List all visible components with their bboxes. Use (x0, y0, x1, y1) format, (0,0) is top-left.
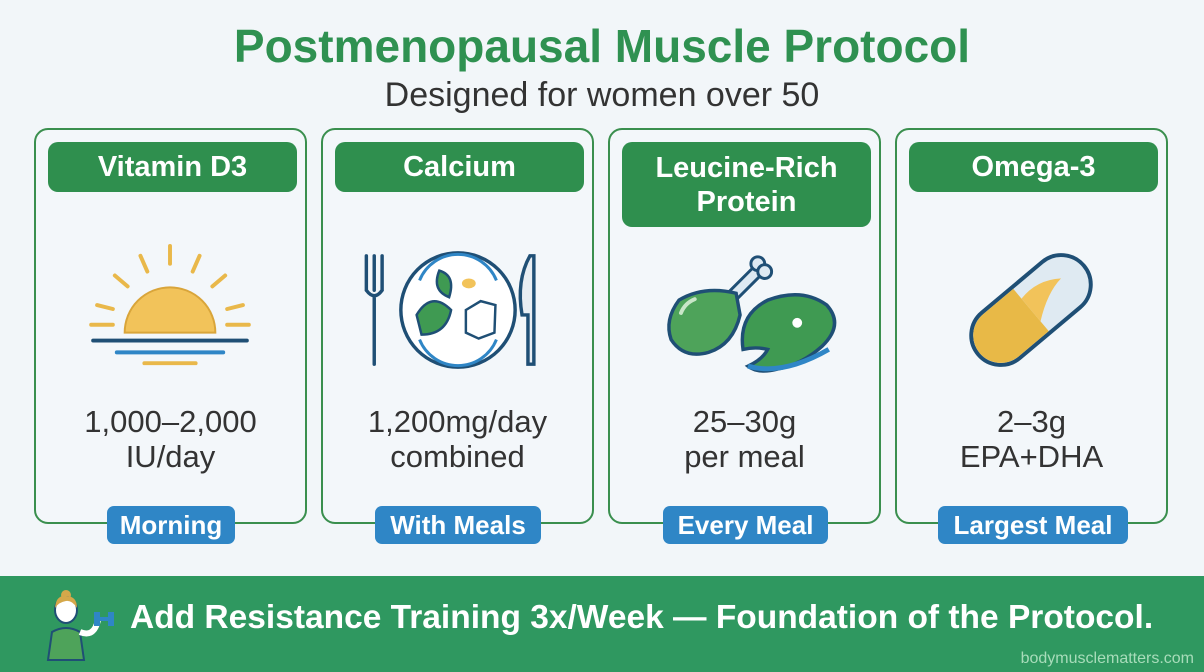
heading: Leucine-Rich Protein: Leucine-Rich (655, 152, 838, 184)
badge: Morning (107, 506, 235, 544)
panel: Leucine-Rich Protein (608, 128, 881, 524)
badge: Largest Meal (938, 506, 1128, 544)
heading: Omega-3: Omega-3 (971, 151, 1096, 183)
panel: Omega-3 (895, 128, 1168, 524)
badge: With Meals: With Meals (390, 510, 526, 540)
badge: With Meals (375, 506, 541, 544)
value: combined (390, 439, 525, 474)
panel: Vitamin D3 (34, 128, 307, 524)
heading: Leucine-Rich Protein (622, 142, 871, 227)
icon: plate (364, 251, 536, 369)
heading: Omega-3 (909, 142, 1158, 192)
badge: Every Meal: Every Meal (678, 510, 813, 540)
icon: woman lifting dumbbell (46, 590, 114, 661)
value (684, 404, 805, 474)
subtitle: Designed for women over 50 (385, 76, 819, 114)
badge: Largest Meal: Largest Meal (954, 510, 1112, 540)
value: per meal (684, 439, 805, 474)
badge: Every Meal (663, 506, 828, 544)
badge: Morning: Morning (120, 510, 222, 540)
icon: sun (89, 244, 251, 366)
heading: Calcium (335, 142, 584, 192)
value: 1,200mg/day (368, 404, 547, 439)
panel: Calcium (321, 128, 594, 524)
value (368, 404, 547, 474)
footer banner (0, 576, 1204, 672)
value: 25–30g (693, 404, 796, 439)
heading: Vitamin D3: Vitamin D3 (98, 151, 247, 183)
value (960, 404, 1104, 474)
icon: chicken and salmon (667, 255, 836, 373)
icon: capsule (969, 253, 1093, 367)
value: 1,000–2,000 (84, 404, 257, 439)
heading: Vitamin D3 (48, 142, 297, 192)
watermark: bodymusclematters.com (1021, 650, 1194, 667)
value: EPA+DHA (960, 439, 1103, 474)
heading: Calcium: Calcium (403, 151, 516, 183)
value: 2–3g (997, 404, 1066, 439)
value (84, 404, 257, 474)
value: IU/day (126, 439, 215, 474)
heading: Leucine-Rich Protein: Protein (697, 186, 796, 218)
title: Postmenopausal Muscle Protocol (234, 20, 970, 72)
footer message: Add Resistance Training 3x/Week — Foundation of the Protocol. (130, 599, 1153, 636)
